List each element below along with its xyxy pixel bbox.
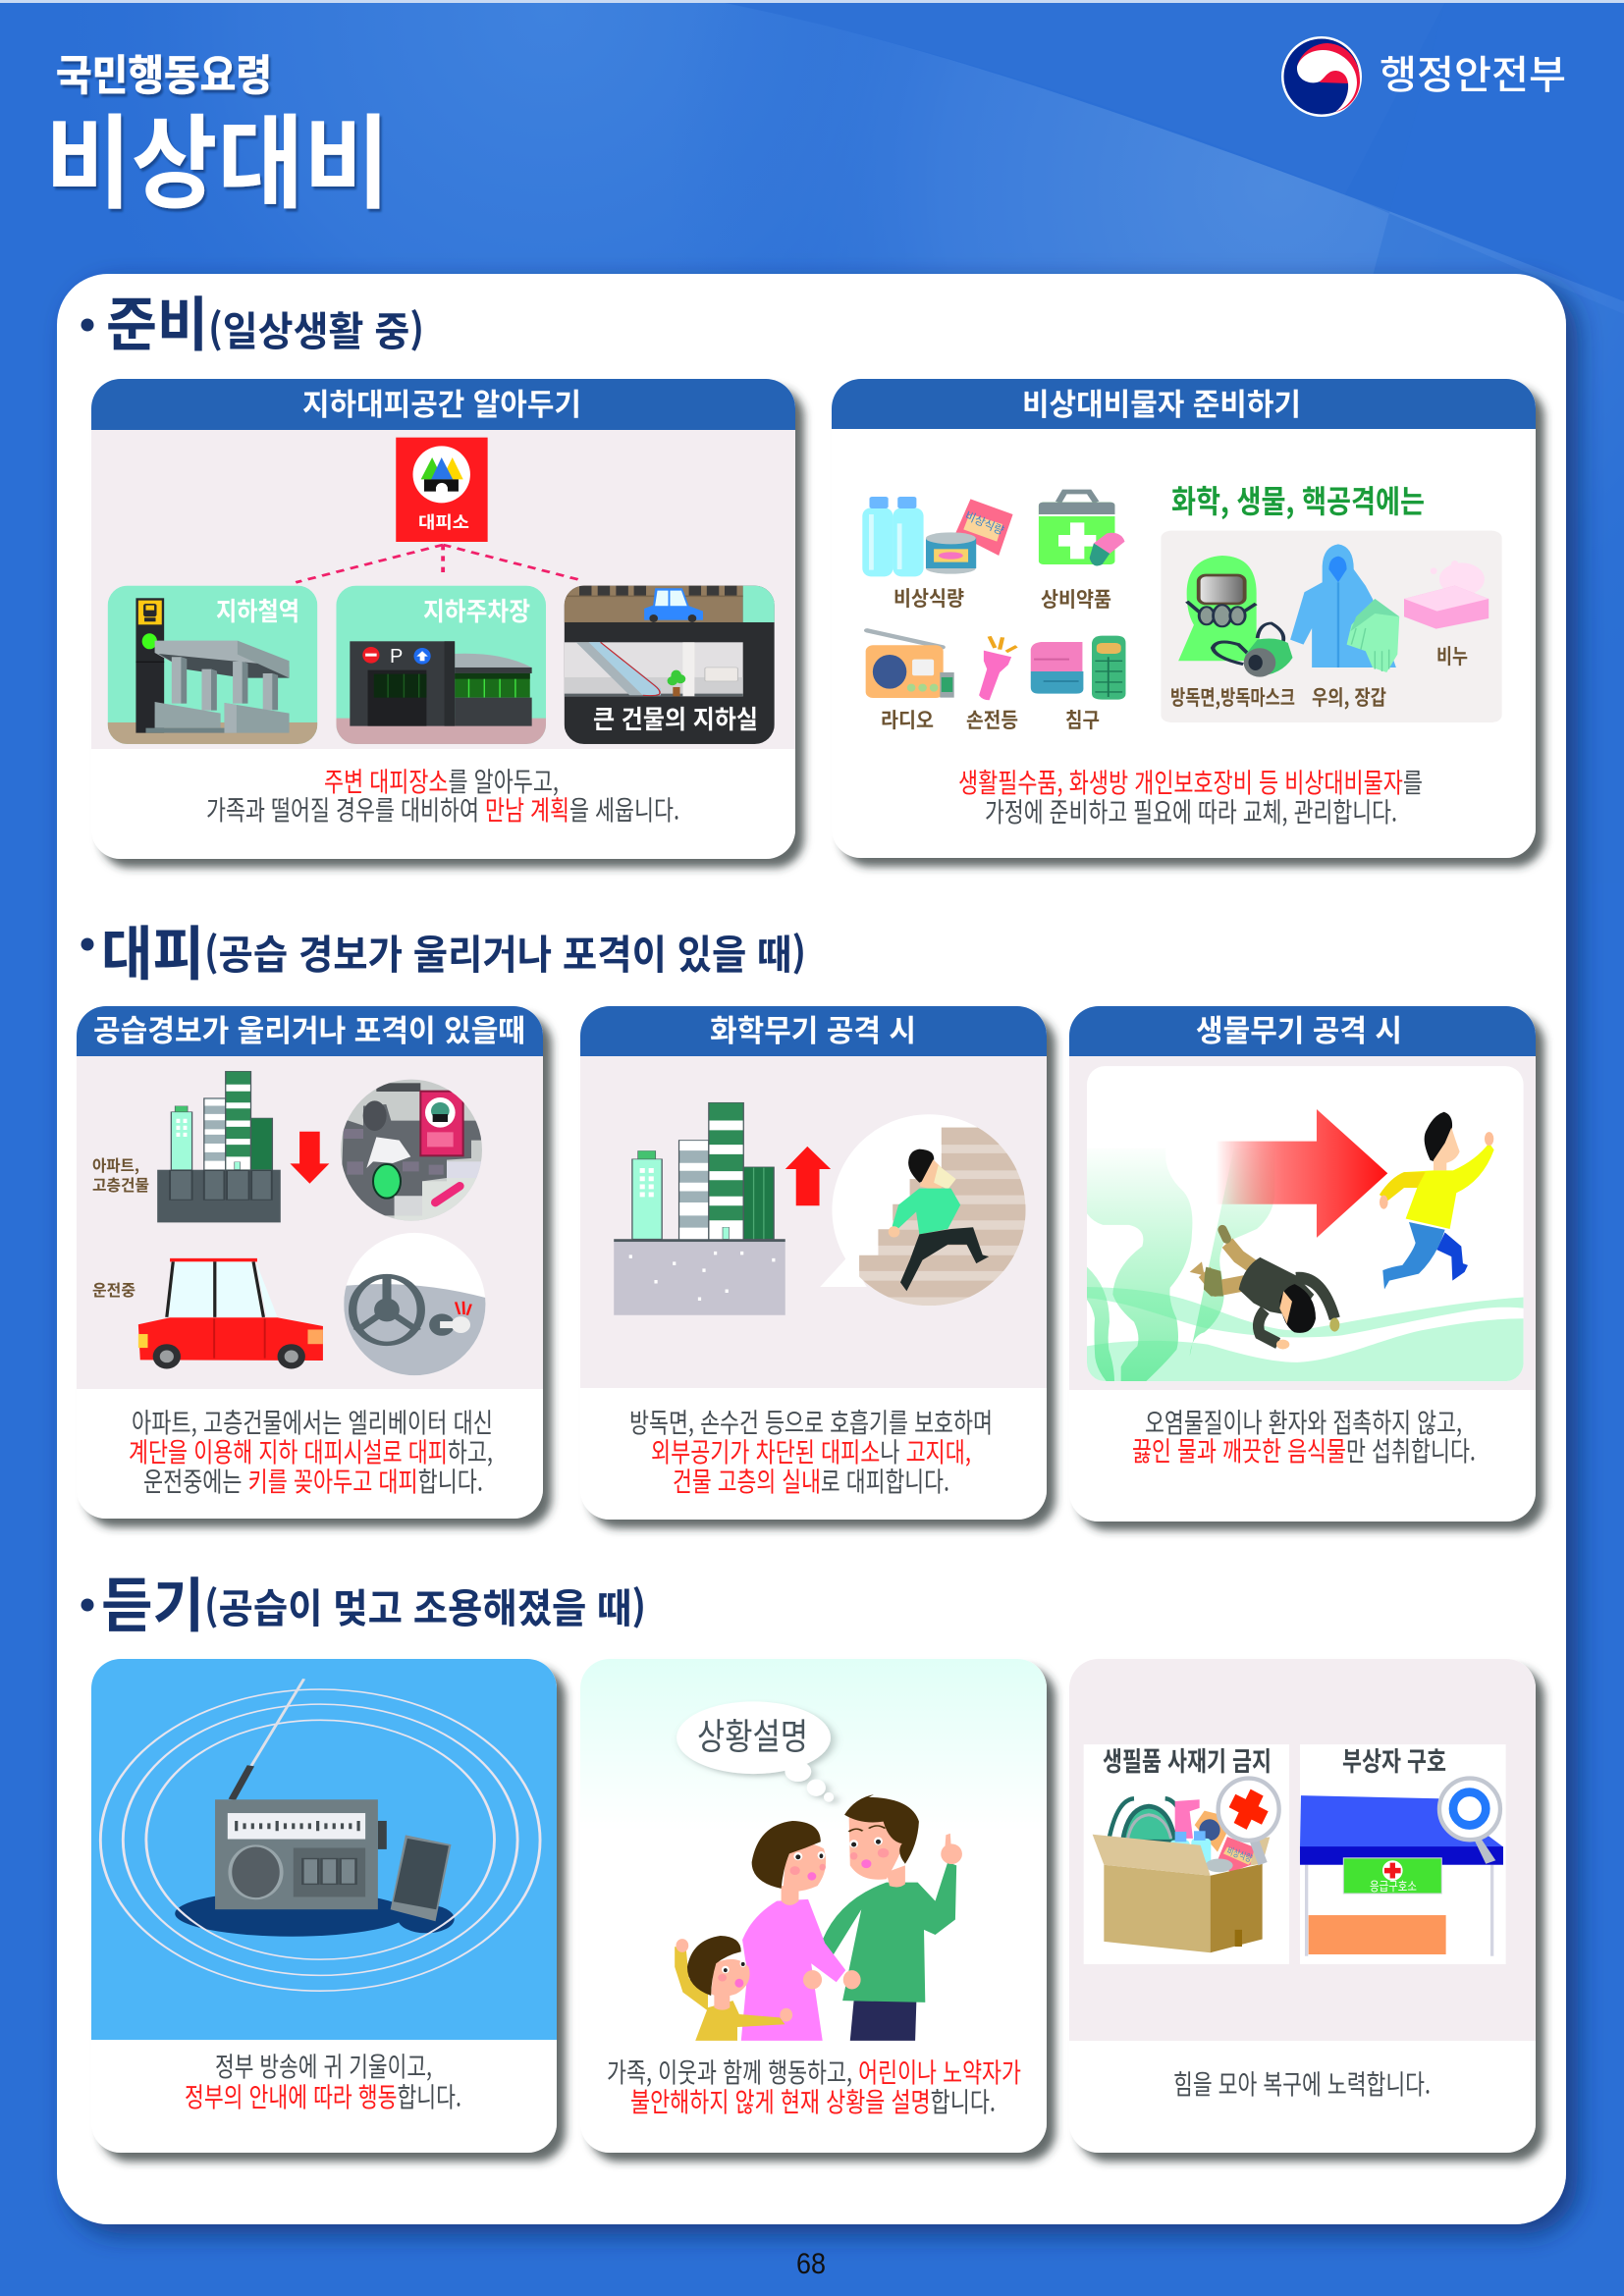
car (138, 1258, 323, 1368)
page number: 68 (796, 2248, 826, 2280)
icon: soap (1404, 561, 1489, 629)
card header: 공습경보가 울리거나 포격이 있을때 (93, 1006, 525, 1050)
heading: evacuate: (공습 경보가 울리거나 포격이 있을 때) (204, 922, 806, 981)
label: basement: 큰 건물의 지하실 (593, 700, 758, 736)
supply labels: 라디오 (881, 705, 934, 734)
item labels: 생필품 사재기 금지 (1103, 1740, 1272, 1779)
body text (1132, 1401, 1476, 1468)
card header (91, 379, 795, 430)
panel: listen to radio (91, 1659, 557, 2153)
speech bubble (677, 1701, 834, 1802)
subtitle: 국민행동요령 (56, 42, 272, 103)
item labels: 비상식량 (1225, 1842, 1255, 1865)
icon: radio (866, 630, 954, 698)
supply labels: 상비약품 (1041, 584, 1111, 614)
supply labels: 비누 (1436, 641, 1468, 670)
body text: 가정에 준비하고 필요에 따라 교체, 관리합니다. (985, 790, 1397, 829)
icon: bedding (1031, 636, 1125, 700)
item labels (1103, 1740, 1446, 1895)
body text: 계단을 이용해 지하 대피시설로 대피하고, (129, 1430, 493, 1469)
icon: water and food (862, 497, 1013, 576)
arrow: escape direction (1216, 1109, 1387, 1238)
item labels: 부상자 구호 (1342, 1740, 1446, 1779)
body text (629, 1401, 993, 1499)
body text: 가족, 이웃과 함께 행동하고, 어린이나 노약자가 (607, 2051, 1021, 2090)
man climbing stairs (820, 1114, 1026, 1306)
card header: 비상대비물자 준비하기 (1022, 380, 1301, 424)
labels (92, 1152, 149, 1301)
panel: chemical attack (580, 1006, 1047, 1520)
logo: ministry emblem and name: 행정안전부 (1380, 43, 1566, 100)
arrow: up (785, 1147, 831, 1205)
main white panel (57, 274, 1566, 2224)
labels: 고층건물 (92, 1172, 149, 1196)
panel: air raid siren (77, 1006, 543, 1519)
body text: 아파트, 고층건물에서는 엘리베이터 대신 (132, 1401, 493, 1440)
body text: 가족과 떨어질 경우를 대비하여 만남 계획을 세웁니다. (206, 788, 679, 828)
body text (129, 1401, 493, 1499)
body text (958, 761, 1423, 829)
family illustration (675, 1794, 962, 2041)
heading: prepare (81, 278, 424, 363)
supply labels: 손전등 (966, 705, 1018, 734)
main title: 비상대비 (45, 80, 390, 229)
cbrn protection box (1161, 531, 1502, 722)
body text: 힘을 모아 복구에 노력합니다. (1173, 2062, 1431, 2102)
heading: cbrn: 화학, 생물, 핵공격에는 (1171, 477, 1425, 522)
heading: listen: 듣기 (101, 1559, 204, 1644)
body text: 외부공기가 차단된 대피소나 고지대, (651, 1430, 971, 1469)
body text: 건물 고층의 실내로 대피합니다. (673, 1460, 949, 1499)
supply labels: 침구 (1065, 705, 1100, 734)
supply labels: 우의, 장갑 (1312, 682, 1386, 712)
body text: 오염물질이나 환자와 접촉하지 않고, (1145, 1401, 1462, 1440)
header title block (45, 42, 390, 229)
panel: biological attack (1069, 1006, 1536, 1522)
bubble text: 상황설명 (697, 1707, 808, 1760)
body text: 정부의 안내에 따라 행동합니다. (185, 2075, 461, 2114)
heading: prepare: 준비 (106, 278, 208, 363)
body text: 끓인 물과 깨끗한 음식물만 섭취합니다. (1132, 1429, 1476, 1468)
high-rise buildings (614, 1102, 785, 1315)
panel: emergency supplies (832, 379, 1536, 858)
card header (832, 379, 1536, 429)
label: parking P: P (390, 646, 403, 667)
icon: shelter sign (396, 438, 488, 542)
label: shelter: 대피소 (418, 508, 469, 533)
card header: 화학무기 공격 시 (710, 1006, 916, 1050)
parking garage scene (336, 586, 546, 744)
body text (607, 2051, 1021, 2119)
body text (206, 760, 679, 828)
arrow: down (290, 1132, 329, 1184)
panel: family (580, 1659, 1047, 2153)
apartment buildings (157, 1071, 281, 1222)
radio illustration (100, 1679, 540, 1991)
labels: 운전중 (92, 1277, 135, 1301)
body text (185, 2045, 461, 2114)
panel: underground shelter (91, 379, 795, 859)
supply labels: 방독면,방독마스크 (1170, 682, 1295, 712)
label: parking: 지하주차장 (423, 592, 530, 628)
ignition key scene (344, 1233, 486, 1375)
card header (1069, 1006, 1536, 1056)
heading: prepare: (일상생활 중) (208, 298, 424, 357)
panel: recovery (1069, 1659, 1536, 2153)
card header (580, 1006, 1047, 1056)
logo: ministry emblem and name (1281, 36, 1566, 117)
dashed connectors (296, 545, 579, 582)
collapsed person (1190, 1230, 1339, 1349)
heading: evacuate: 대피 (101, 907, 204, 992)
no hoarding illustration (1084, 1744, 1289, 1964)
body text: 불안해하지 않게 현재 상황을 설명합니다. (630, 2080, 996, 2119)
illustration area (91, 430, 795, 749)
card header: 지하대피공간 알아두기 (302, 380, 581, 424)
body text: 주변 대피장소를 알아두고, (324, 760, 559, 799)
small food label: 비상식량 (962, 507, 1007, 539)
icon: first aid kit (1039, 492, 1125, 565)
running person (1380, 1112, 1494, 1289)
card header: 생물무기 공격 시 (1196, 1006, 1402, 1050)
contaminated air scene (1087, 1066, 1524, 1381)
first aid tent illustration (1300, 1744, 1506, 1964)
body text: 운전중에는 키를 꽂아두고 대피합니다. (143, 1460, 483, 1499)
icon: raincoat and gloves (1290, 544, 1399, 672)
subway station scene (108, 586, 317, 744)
label: subway: 지하철역 (216, 592, 299, 628)
icon: flashlight (979, 636, 1016, 700)
labels: 아파트, (92, 1152, 139, 1176)
item labels: 응급구호소 (1370, 1876, 1417, 1895)
body text: 생활필수품, 화생방 개인보호장비 등 비상대비물자를 (958, 761, 1423, 800)
shelter stairs scene (341, 1079, 483, 1221)
supply labels: 비상식량 (893, 583, 964, 613)
heading: evacuate (81, 907, 806, 992)
icon: gas mask (1178, 556, 1293, 677)
building basement scene (565, 586, 775, 744)
heading: listen (81, 1559, 646, 1644)
heading: listen: (공습이 멎고 조용해졌을 때) (204, 1575, 646, 1634)
body text: 정부 방송에 귀 기울이고, (215, 2045, 432, 2084)
supply labels (881, 583, 1468, 734)
body text: 방독면, 손수건 등으로 호흡기를 보호하며 (629, 1401, 993, 1440)
